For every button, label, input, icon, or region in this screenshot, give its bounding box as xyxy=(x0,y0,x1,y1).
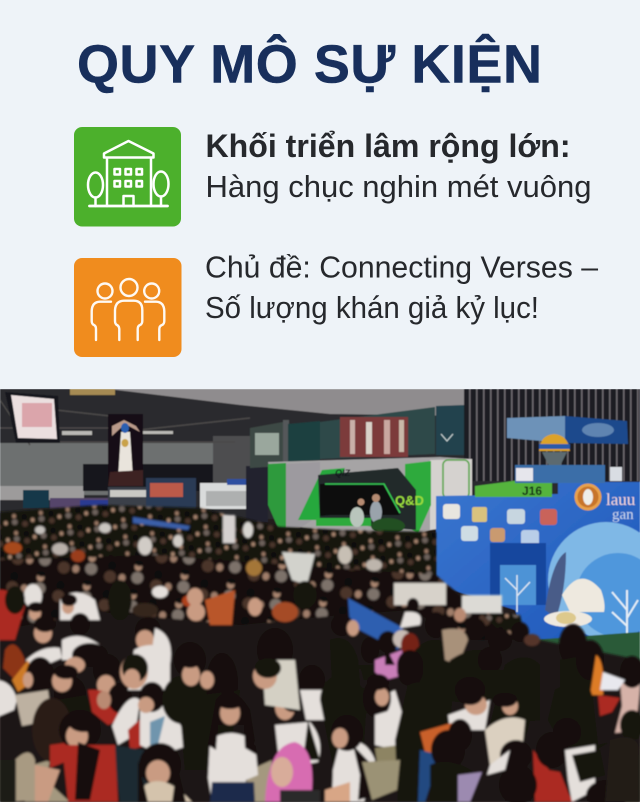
vertical screen with trophy xyxy=(108,414,143,486)
foreground people, left xyxy=(0,580,336,802)
text: tens of thousands of square metres: Hàng chục nghin mét vuông xyxy=(206,169,592,204)
blue food booth: gan xyxy=(612,507,634,523)
upper video screens xyxy=(250,405,465,468)
hall ceiling and walls xyxy=(0,389,640,802)
left wall screen xyxy=(5,392,60,443)
heading: exhibition area: Khối triển lâm rộng lớn: xyxy=(206,128,570,164)
green stage booth: QIZ xyxy=(335,468,351,478)
green stage booth: Q&D xyxy=(395,493,424,508)
title: QUY MÔ SỰ KIỆN xyxy=(77,34,542,94)
hanging blue sign xyxy=(507,416,628,444)
photo: crowded exhibition hall xyxy=(0,389,640,802)
distant crowd xyxy=(0,505,530,660)
back hall stands xyxy=(23,466,268,522)
blue food booth: J16 xyxy=(522,484,542,498)
text: theme Connecting Verses: Chủ đề: Connecting Verses – xyxy=(205,250,599,284)
green stage booth xyxy=(268,457,472,538)
foreground crowd base xyxy=(0,610,640,802)
lamp dome xyxy=(539,434,570,466)
icon: building on green tile xyxy=(74,127,181,226)
floor patches xyxy=(15,760,422,802)
icon: people on orange tile xyxy=(74,258,182,357)
blue food booth: lauu xyxy=(606,490,636,509)
blue food booth xyxy=(436,465,640,668)
text: record audience: Số lượng khán giả kỷ lục! xyxy=(205,290,539,325)
foreground people, right xyxy=(320,598,640,802)
striped dark wall xyxy=(464,389,640,481)
header section xyxy=(74,34,599,357)
